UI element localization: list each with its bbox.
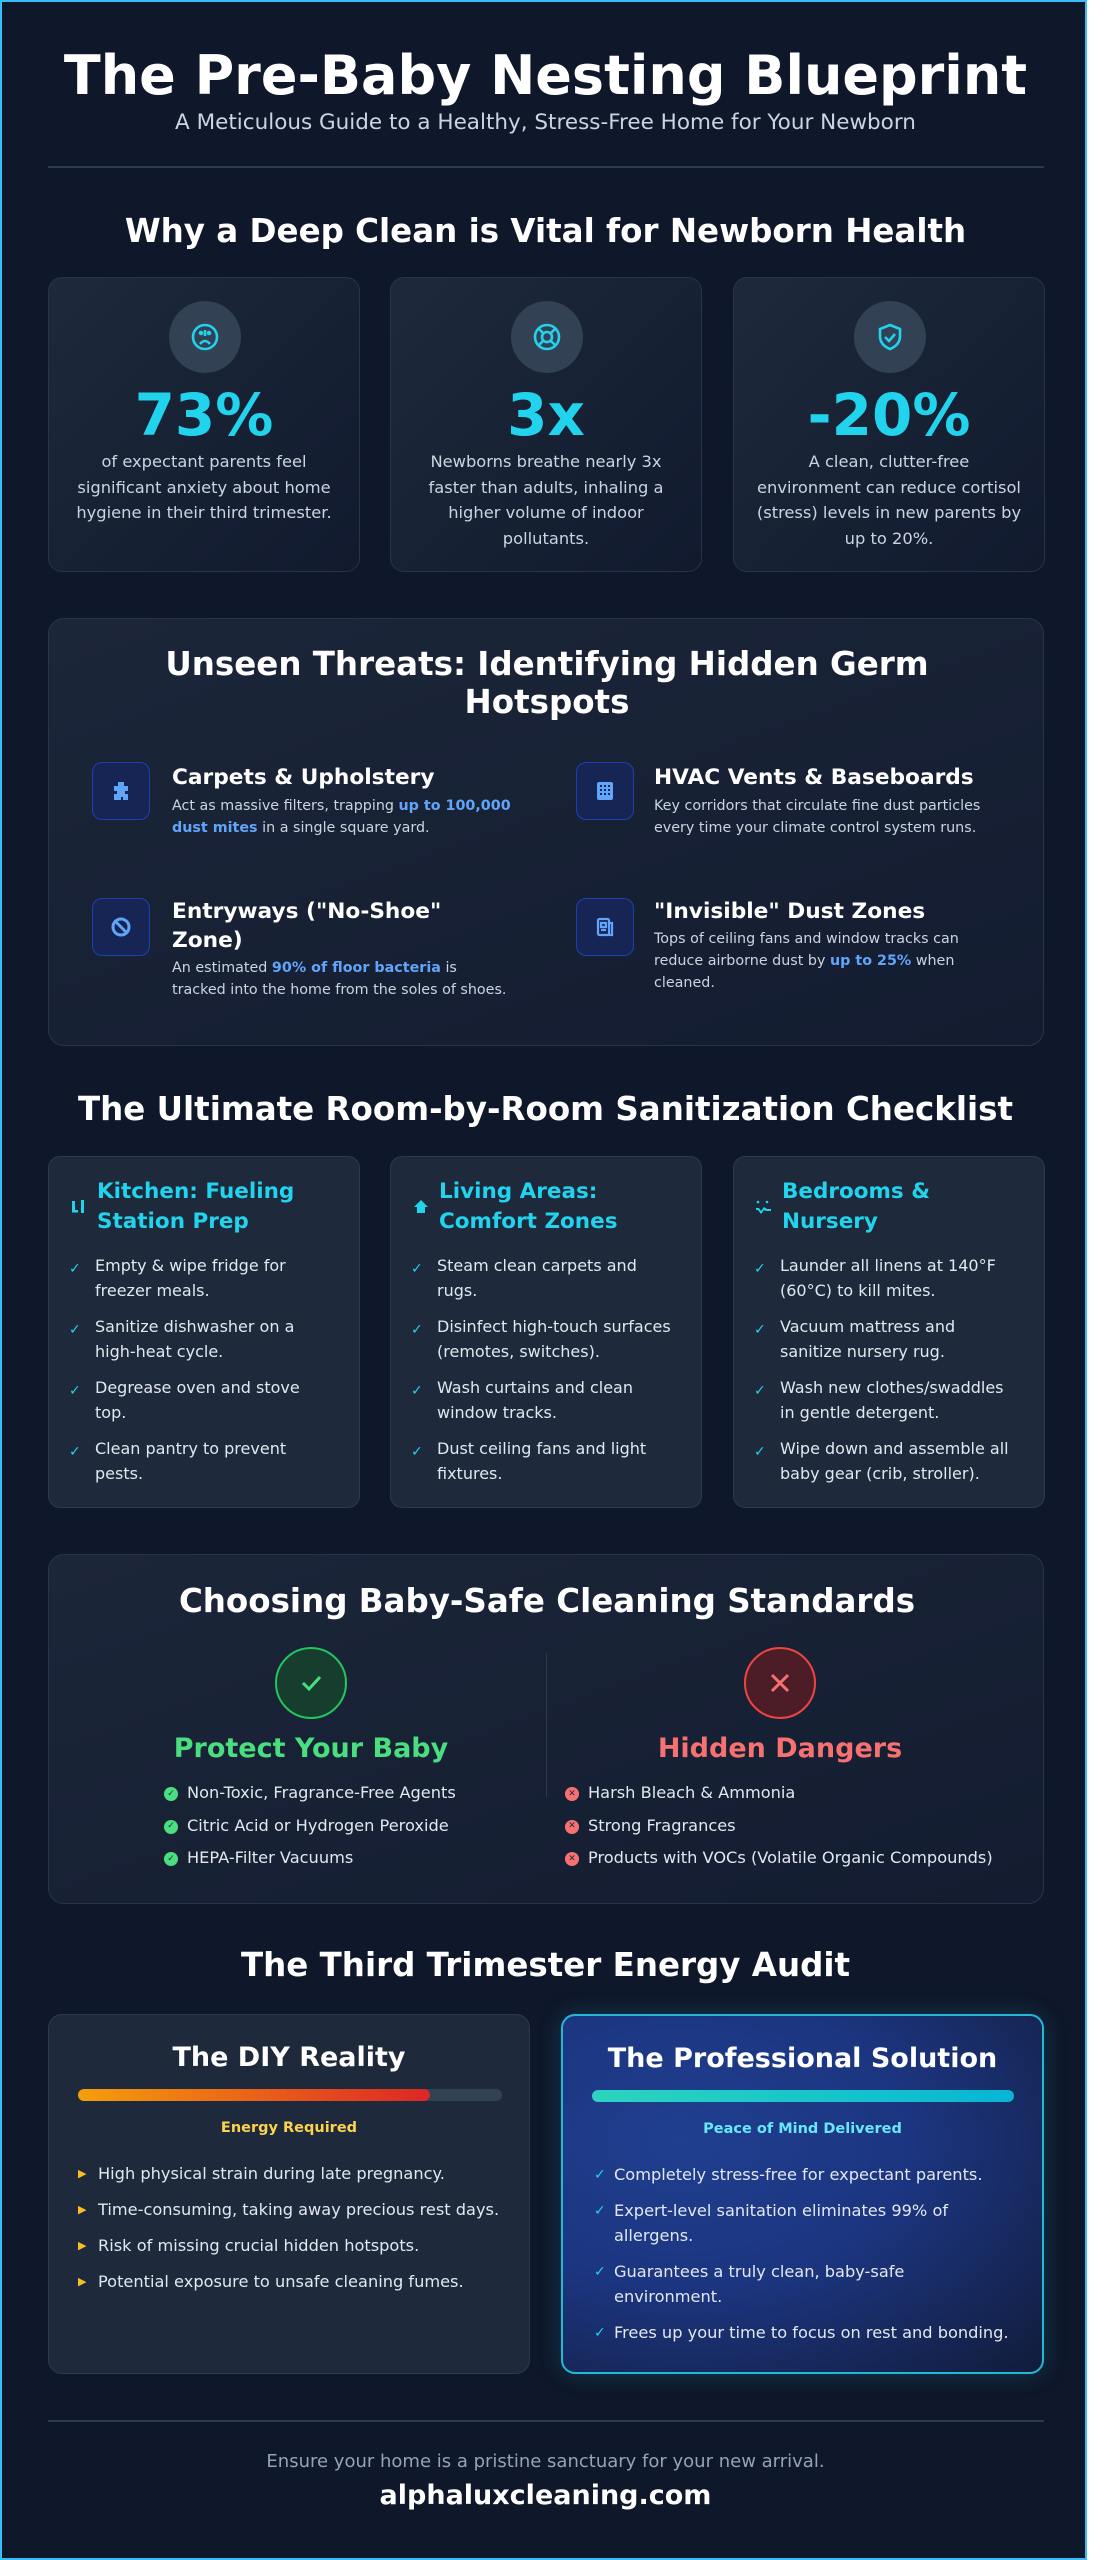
item: invisible dust: "Invisible" Dust Zones — [654, 899, 925, 924]
card: kitchen — [48, 1156, 360, 1508]
stat card: 3x: higher volume of indoor — [448, 503, 644, 522]
card: DIY reality — [48, 2014, 530, 2374]
card: bedrooms: Wash new clothes/swaddles — [780, 1378, 1004, 1397]
item: entryways: Zone) — [172, 928, 243, 953]
heading: Choosing Baby-Safe Cleaning Standards — [179, 1582, 915, 1620]
heading: Unseen Threats: Identifying Hidden Germ — [165, 645, 929, 683]
card: bedrooms: (60°C) to kill mites. — [780, 1281, 936, 1300]
card: DIY reality: ▶ — [78, 2275, 86, 2288]
item: invisible dust: reduce airborne dust by up to 25% when — [654, 953, 954, 969]
footer domain: alphaluxcleaning.com — [380, 2480, 711, 2511]
item: carpets: dust mites in a single square yard. — [172, 820, 430, 836]
card: DIY reality: ▶ — [78, 2167, 86, 2180]
card: bedrooms: Launder all linens at 140°F — [780, 1256, 996, 1275]
card: bedrooms: Nursery — [782, 1209, 878, 1234]
bar: peace of mind — [592, 2090, 1014, 2102]
card: living areas: fixtures. — [437, 1464, 502, 1483]
list: dangers: ✕ — [568, 1821, 576, 1831]
card: bedrooms: Wipe down and assemble all — [780, 1439, 1009, 1458]
stat card: -20% — [733, 277, 1045, 572]
card: professional solution: ✓ — [594, 2167, 606, 2183]
card: kitchen: Kitchen: Fueling — [97, 1179, 294, 1204]
list: safe: ✓ — [167, 1821, 175, 1831]
stat card: 3x: Newborns breathe nearly 3x — [430, 452, 662, 471]
list: safe — [164, 1783, 456, 1867]
footer text: Ensure your home is a pristine sanctuary for your new arrival. — [266, 2451, 825, 2472]
icon: utensils — [72, 1200, 84, 1213]
card: bedrooms — [733, 1156, 1045, 1508]
stat card: 3x: 3x — [507, 381, 585, 449]
card: kitchen: Degrease oven and stove — [95, 1378, 300, 1397]
card: living areas: Wash curtains and clean — [437, 1378, 633, 1397]
stat card: 73%: 73% — [135, 381, 273, 449]
item: invisible dust: cleaned. — [654, 975, 715, 991]
card: living areas: Comfort Zones — [439, 1209, 618, 1234]
stat card: -20%: environment can reduce cortisol — [757, 478, 1021, 496]
stat card: 3x: faster than adults, inhaling a — [428, 478, 664, 496]
item: invisible dust: Tops of ceiling fans and window tracks can — [654, 931, 959, 947]
item: entryways: Entryways ("No-Shoe" — [172, 899, 441, 924]
card: professional solution: ✓ — [594, 2264, 606, 2280]
list: dangers: Products with VOCs (Volatile Organic Compounds) — [588, 1848, 993, 1867]
card: living areas: Dust ceiling fans and light — [437, 1439, 646, 1458]
title: The Pre-Baby Nesting Blueprint — [64, 44, 1027, 107]
item: HVAC: every time your climate control system runs. — [654, 820, 976, 836]
stat card: 3x — [390, 277, 702, 572]
subtitle: A Meticulous Guide to a Healthy, Stress-Free Home for Your Newborn — [175, 110, 916, 135]
card: DIY reality: Energy Required — [221, 2120, 357, 2136]
stat card: -20%: A clean, clutter-free — [809, 452, 969, 471]
stat card: 3x: pollutants. — [503, 528, 589, 548]
column: protect your baby — [164, 1647, 456, 1867]
card: kitchen: high-heat cycle. — [95, 1342, 223, 1361]
card: living areas: Disinfect high-touch surfaces — [437, 1317, 671, 1336]
icon: red x circle — [744, 1647, 816, 1719]
heading: checklist: The Ultimate Room-by-Room Sanitization Checklist — [78, 1090, 1013, 1128]
card: professional solution: allergens. — [614, 2226, 693, 2245]
list: dangers: ✕ — [568, 1789, 576, 1799]
item: entryways — [92, 898, 506, 998]
card: bedrooms: Vacuum mattress and — [780, 1317, 955, 1336]
list: safe: ✓ — [167, 1854, 175, 1864]
card: professional solution: ✓ — [594, 2325, 606, 2341]
item: HVAC: Key corridors that circulate fine dust particles — [654, 798, 980, 814]
card: DIY reality: The DIY Reality — [172, 2042, 406, 2073]
heading: why deep clean: Why a Deep Clean is Vital for Newborn Health — [125, 212, 966, 250]
heading — [165, 645, 929, 721]
panel: hidden germ hotspots — [48, 618, 1044, 1046]
card: living areas: (remotes, switches). — [437, 1342, 600, 1361]
card: kitchen: Empty & wipe fridge for — [95, 1256, 286, 1275]
card: professional solution: Frees up your time to focus on rest and bonding. — [614, 2323, 1009, 2342]
card: kitchen: top. — [95, 1403, 126, 1422]
stat card: 73%: hygiene in their third trimester. — [76, 503, 332, 522]
card: kitchen: Clean pantry to prevent — [95, 1439, 286, 1458]
card: bedrooms: baby gear (crib, stroller). — [780, 1464, 980, 1483]
card: DIY reality: Time-consuming, taking away precious rest days. — [98, 2200, 499, 2219]
card: bedrooms: sanitize nursery rug. — [780, 1342, 945, 1361]
card: living areas — [390, 1156, 702, 1508]
column: hidden dangers: Hidden Dangers — [658, 1733, 902, 1764]
card: professional solution: Completely stress-free for expectant parents. — [614, 2165, 982, 2184]
list: dangers: Harsh Bleach & Ammonia — [588, 1783, 795, 1802]
card: bedrooms: Bedrooms & — [782, 1179, 930, 1204]
stat card: -20%: (stress) levels in new parents by — [757, 503, 1021, 522]
card: DIY reality: Potential exposure to unsafe cleaning fumes. — [98, 2272, 464, 2291]
card: DIY reality: High physical strain during late pregnancy. — [98, 2164, 445, 2183]
card: living areas: Living Areas: — [439, 1179, 597, 1204]
card: professional solution: ✓ — [594, 2203, 606, 2219]
card: professional solution: environment. — [614, 2287, 722, 2306]
item: HVAC — [576, 762, 980, 836]
list: safe: HEPA-Filter Vacuums — [187, 1848, 353, 1867]
card: DIY reality: Risk of missing crucial hidden hotspots. — [98, 2236, 419, 2255]
item: carpets: Carpets & Upholstery — [172, 765, 434, 790]
item: carpets: Act as massive filters, trapping up to 100,000 — [172, 798, 511, 814]
card: bedrooms: in gentle detergent. — [780, 1403, 939, 1422]
stat card: -20%: up to 20%. — [845, 528, 933, 548]
icon: anxious face — [169, 301, 241, 373]
bar: energy required — [78, 2089, 502, 2101]
list: safe: Citric Acid or Hydrogen Peroxide — [187, 1816, 449, 1834]
card: living areas: Steam clean carpets and — [437, 1256, 637, 1275]
card: DIY reality: ▶ — [78, 2203, 86, 2216]
card: living areas: window tracks. — [437, 1403, 557, 1422]
icon: shield check — [854, 301, 926, 373]
card: professional solution — [561, 2014, 1044, 2374]
heading: Hotspots — [465, 683, 629, 721]
item: entryways: tracked into the home from the soles of shoes. — [172, 982, 506, 998]
list: dangers — [565, 1783, 993, 1867]
column: protect your baby: Protect Your Baby — [174, 1733, 448, 1764]
stat card: -20%: -20% — [808, 381, 970, 449]
icon: house — [414, 1200, 428, 1213]
card: kitchen: Station Prep — [97, 1209, 249, 1234]
card: DIY reality: ▶ — [78, 2239, 86, 2252]
card: professional solution: Peace of Mind Delivered — [703, 2121, 902, 2137]
card: living areas: rugs. — [437, 1281, 477, 1300]
list: safe: Non-Toxic, Fragrance-Free Agents — [187, 1783, 456, 1802]
item: HVAC: HVAC Vents & Baseboards — [654, 765, 974, 790]
card: professional solution: Guarantees a truly clean, baby-safe — [614, 2262, 904, 2281]
stat card: 73%: of expectant parents feel — [101, 452, 307, 471]
card: kitchen: freezer meals. — [95, 1281, 210, 1300]
item: carpets — [92, 762, 511, 836]
icon: green check circle — [275, 1647, 347, 1719]
heading: energy audit: The Third Trimester Energy Audit — [241, 1946, 850, 1984]
list: safe: ✓ — [167, 1789, 175, 1799]
icon: baby — [756, 1200, 771, 1214]
item: entryways: An estimated 90% of floor bacteria is — [172, 960, 457, 976]
column: hidden dangers — [565, 1647, 993, 1867]
item: invisible dust — [576, 898, 959, 991]
card: kitchen: Sanitize dishwasher on a — [95, 1317, 294, 1336]
icon: lifebuoy — [511, 301, 583, 373]
list: dangers: Strong Fragrances — [588, 1816, 736, 1834]
list: dangers: ✕ — [568, 1854, 576, 1864]
stat card: 73%: significant anxiety about home — [77, 478, 331, 496]
stat card: 73% — [48, 277, 360, 572]
card: professional solution: The Professional Solution — [608, 2043, 997, 2074]
card: kitchen: pests. — [95, 1464, 143, 1483]
card: professional solution: Expert-level sanitation eliminates 99% of — [614, 2201, 948, 2220]
panel: baby-safe standards — [48, 1554, 1044, 1904]
